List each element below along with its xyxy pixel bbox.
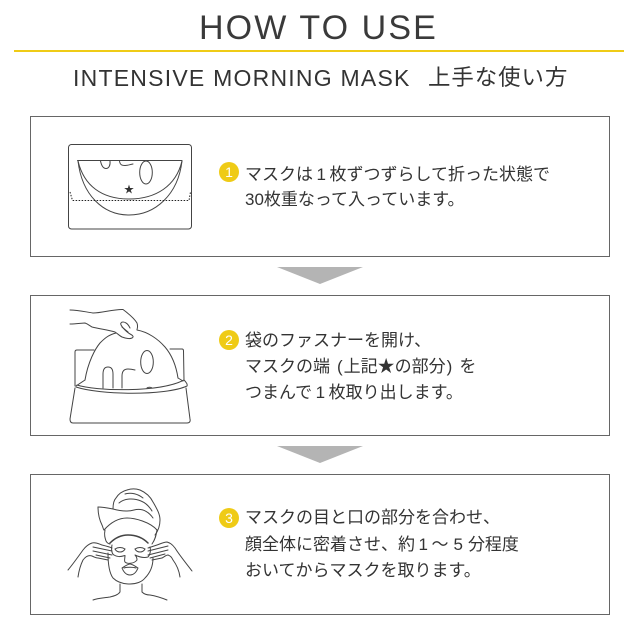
arrow 2 [277,446,363,463]
text: つまんで1枚取り出します。 [245,383,463,402]
title: HOW TO USE [199,9,438,47]
text: マスクの端 (上記★の部分) を [245,357,476,376]
subtitle: INTENSIVE MORNING MASK [73,65,411,91]
step 2 text [245,331,476,402]
panel: step 3 [30,474,610,615]
text: 30枚重なって入っています。 [245,190,465,209]
panel: step 2 [30,295,610,436]
step 1 badge [219,162,239,182]
text: マスクの目と口の部分を合わせ、 [245,508,500,527]
step 3 badge [219,508,239,528]
text: 上手な使い方 [428,65,568,90]
text: 顔全体に密着させ、約1～ 5 分程度 [245,535,519,554]
text: マスクは1枚ずつずらして折った状態で [245,165,550,184]
subtitle [73,65,568,91]
panel: step 1 [30,116,610,257]
step 1 badge: 1 [225,164,233,180]
step 1 text [245,165,550,209]
icon: star on mask: ★ [124,185,134,196]
title underline [14,50,624,52]
arrow 1 [277,267,363,284]
text: 袋のファスナーを開け、 [245,331,431,350]
step 2 badge [219,330,239,350]
step 3 badge: 3 [225,510,233,526]
text: おいてからマスクを取ります。 [245,561,481,580]
step 2 badge: 2 [225,332,233,348]
step 3 text [245,508,519,580]
